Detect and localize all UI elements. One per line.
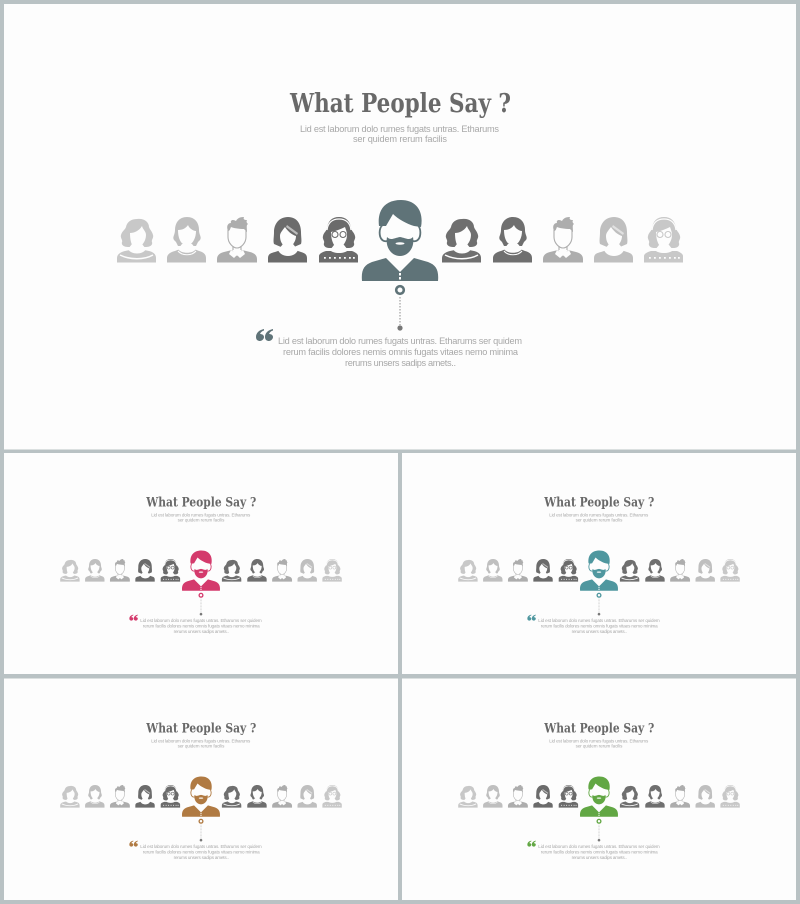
connector — [597, 593, 601, 615]
subtitle — [300, 124, 499, 144]
subtitle: Lid est laborum dolo rumes fugats untras. Etharums — [151, 513, 251, 518]
subtitle: ser quidem rerum facilis — [178, 744, 225, 749]
icon: featured man teal — [580, 550, 618, 591]
subtitle — [549, 513, 649, 523]
testimonial text: rerum facilis dolores nemis omnis fugats vitaes nemo minima — [541, 850, 658, 855]
testimonial text — [538, 618, 660, 634]
title: What People Say ? — [543, 722, 654, 737]
avatar row — [458, 785, 740, 808]
testimonial text — [140, 618, 262, 634]
icon: quote mark — [527, 615, 536, 621]
title: What People Say ? — [145, 496, 256, 511]
testimonial text: rerums unsers sadips amets.. — [345, 358, 456, 368]
subtitle — [549, 739, 649, 749]
testimonial text: Lid est laborum dolo rumes fugats untras. Etharums ser quidem — [278, 336, 522, 346]
subtitle: Lid est laborum dolo rumes fugats untras. Etharums — [549, 513, 649, 518]
icon: quote mark — [129, 841, 138, 847]
subtitle: Lid est laborum dolo rumes fugats untras. Etharums — [549, 739, 649, 744]
subtitle: Lid est laborum dolo rumes fugats untras. Etharums — [300, 124, 499, 134]
testimonial text — [140, 844, 262, 860]
subtitle: ser quidem rerum facilis — [353, 134, 447, 144]
testimonial text: rerum facilis dolores nemis omnis fugats vitaes nemo minima — [143, 850, 260, 855]
avatar row — [60, 559, 342, 582]
icon: quote mark — [256, 329, 273, 341]
avatar row — [60, 785, 342, 808]
testimonial text: rerums unsers sadips amets.. — [174, 855, 229, 860]
connector — [199, 819, 203, 841]
connector — [396, 286, 404, 331]
avatar row — [117, 217, 683, 262]
icon: featured man pink — [182, 550, 220, 591]
testimonial text — [538, 844, 660, 860]
panel: main slide — [4, 4, 796, 450]
subtitle — [151, 739, 251, 749]
subtitle — [151, 513, 251, 523]
title: What People Say ? — [543, 496, 654, 511]
panel: brown slide — [4, 678, 398, 900]
title: What People Say ? — [145, 722, 256, 737]
panel: pink slide — [4, 453, 398, 674]
subtitle: ser quidem rerum facilis — [178, 518, 225, 523]
testimonial text: rerum facilis dolores nemis omnis fugats vitaes nemo minima — [283, 347, 519, 357]
subtitle: Lid est laborum dolo rumes fugats untras. Etharums — [151, 739, 251, 744]
testimonial text: rerums unsers sadips amets.. — [572, 629, 627, 634]
subtitle: ser quidem rerum facilis — [576, 744, 623, 749]
connector — [199, 593, 203, 615]
testimonial text: rerum facilis dolores nemis omnis fugats vitaes nemo minima — [541, 624, 658, 629]
testimonial text — [278, 336, 522, 368]
connector — [597, 819, 601, 841]
testimonial text: rerum facilis dolores nemis omnis fugats vitaes nemo minima — [143, 624, 260, 629]
icon: featured man brown — [182, 776, 220, 817]
icon: featured man green — [580, 776, 618, 817]
testimonial text: rerums unsers sadips amets.. — [174, 629, 229, 634]
subtitle: ser quidem rerum facilis — [576, 518, 623, 523]
icon: quote mark — [527, 841, 536, 847]
title: What People Say ? — [289, 89, 511, 119]
testimonial text: rerums unsers sadips amets.. — [572, 855, 627, 860]
panel: teal slide — [402, 453, 796, 674]
icon: featured bearded man — [362, 200, 438, 281]
icon: quote mark — [129, 615, 138, 621]
testimonial text: Lid est laborum dolo rumes fugats untras. Etharums ser quidem — [140, 844, 262, 849]
testimonial text: Lid est laborum dolo rumes fugats untras. Etharums ser quidem — [538, 618, 660, 623]
avatar row — [458, 559, 740, 582]
testimonial text: Lid est laborum dolo rumes fugats untras. Etharums ser quidem — [538, 844, 660, 849]
panel: green slide — [402, 678, 796, 900]
testimonial text: Lid est laborum dolo rumes fugats untras. Etharums ser quidem — [140, 618, 262, 623]
